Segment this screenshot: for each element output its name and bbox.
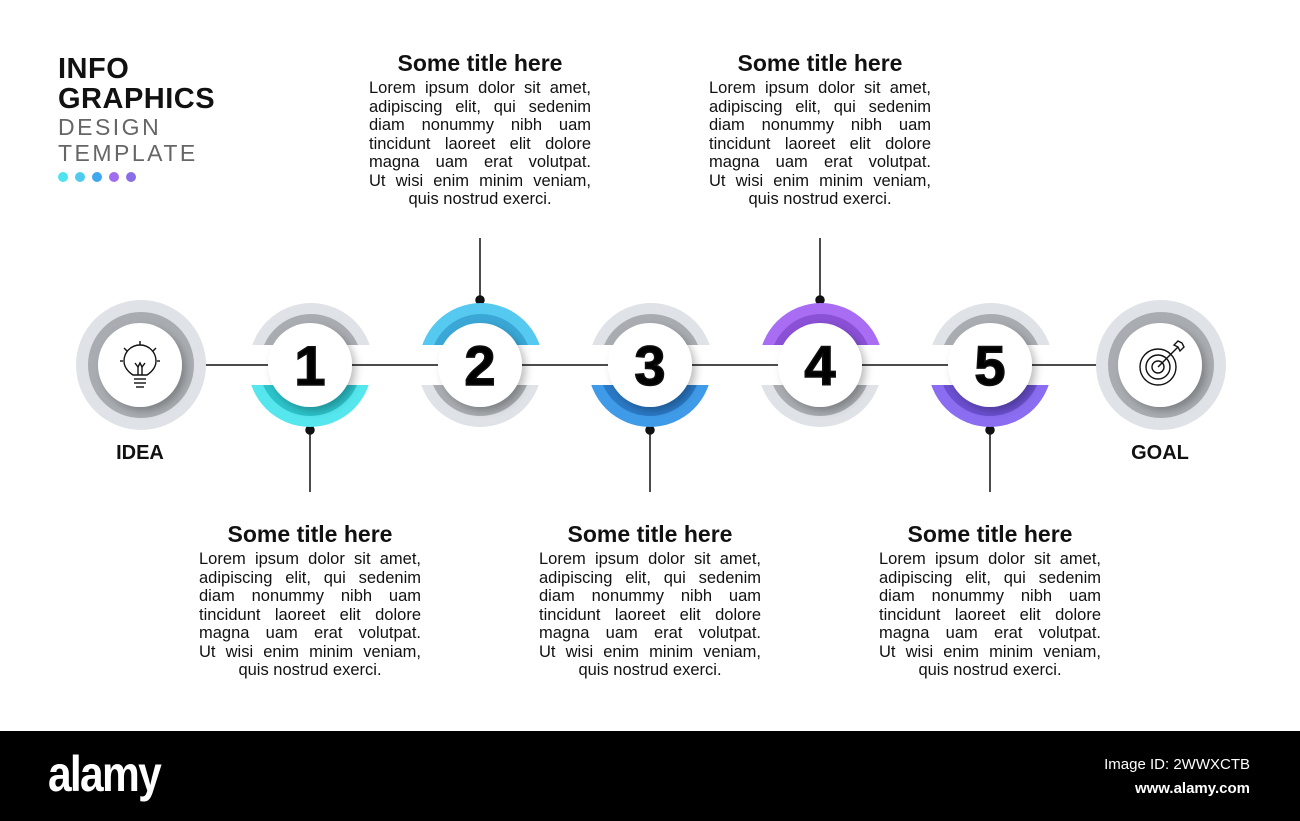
node: goal bbox=[1096, 300, 1226, 430]
dots bbox=[58, 172, 136, 182]
text block: step 1: quis nostrud exerci. bbox=[238, 661, 382, 679]
text block: step 4: diam nonummy nibh uam bbox=[709, 116, 931, 134]
text block: step 1: Lorem ipsum dolor sit amet, bbox=[199, 550, 421, 568]
text block: step 4 bbox=[709, 50, 931, 208]
text block: step 2: Ut wisi enim minim veniam, bbox=[369, 172, 591, 190]
connector line bbox=[140, 364, 1160, 366]
vertical connectors bbox=[306, 238, 994, 492]
node: idea bbox=[76, 300, 206, 430]
text block: step 2: tincidunt laoreet elit dolore bbox=[369, 134, 591, 152]
text block: step 2: Some title here bbox=[398, 50, 562, 76]
timeline graphic bbox=[76, 238, 1226, 492]
text block: step 3: quis nostrud exerci. bbox=[578, 661, 722, 679]
text block: step 3: tincidunt laoreet elit dolore bbox=[539, 606, 761, 624]
text block: step 3 bbox=[539, 521, 761, 679]
image id: Image ID: 2WWXCTB bbox=[1104, 756, 1250, 773]
label: IDEA: IDEA bbox=[116, 442, 164, 464]
title block: INFO bbox=[58, 53, 129, 85]
icon: light bulb bbox=[120, 341, 160, 387]
node 5 bbox=[928, 303, 1053, 427]
text block: step 5: magna uam erat volutpat. bbox=[879, 624, 1101, 642]
text block: step 5 bbox=[879, 521, 1101, 679]
text block: step 4: magna uam erat volutpat. bbox=[709, 153, 931, 171]
text block: step 5: quis nostrud exerci. bbox=[918, 661, 1062, 679]
title block: TEMPLATE bbox=[58, 140, 198, 166]
title block: DESIGN bbox=[58, 114, 161, 140]
node 4: 4 bbox=[804, 334, 836, 397]
text block: step 2: adipiscing elit, qui sedenim bbox=[369, 98, 591, 116]
text block: step 2: magna uam erat volutpat. bbox=[369, 153, 591, 171]
icon: target bbox=[1140, 341, 1184, 385]
node 3 bbox=[588, 303, 713, 427]
node 4 bbox=[758, 303, 883, 427]
text block: step 4: Ut wisi enim minim veniam, bbox=[709, 172, 931, 190]
text block: step 3: magna uam erat volutpat. bbox=[539, 624, 761, 642]
node 2 bbox=[418, 303, 543, 427]
text block: step 1: diam nonummy nibh uam bbox=[199, 587, 421, 605]
text block: step 1: tincidunt laoreet elit dolore bbox=[199, 606, 421, 624]
node 3: 3 bbox=[634, 334, 666, 397]
text block: step 5: Some title here bbox=[908, 521, 1072, 547]
text block: step 5: diam nonummy nibh uam bbox=[879, 587, 1101, 605]
text block: step 1 bbox=[199, 521, 421, 679]
text block: step 3: Lorem ipsum dolor sit amet, bbox=[539, 550, 761, 568]
text block: step 4: tincidunt laoreet elit dolore bbox=[709, 134, 931, 152]
image id bbox=[1104, 756, 1250, 797]
text block: step 2 bbox=[369, 50, 591, 208]
node 1 bbox=[248, 303, 373, 427]
label: GOAL: GOAL bbox=[1131, 442, 1189, 464]
logo: alamy: alamy bbox=[48, 746, 160, 802]
text block: step 1: Some title here bbox=[228, 521, 392, 547]
title block bbox=[58, 53, 215, 182]
node 1: 1 bbox=[294, 334, 326, 397]
text block: step 5: Lorem ipsum dolor sit amet, bbox=[879, 550, 1101, 568]
text block: step 1: magna uam erat volutpat. bbox=[199, 624, 421, 642]
footer bar bbox=[0, 731, 1300, 821]
node 2: 2 bbox=[464, 334, 496, 397]
text block: step 3: Some title here bbox=[568, 521, 732, 547]
text block: step 3: diam nonummy nibh uam bbox=[539, 587, 761, 605]
text block: step 2: Lorem ipsum dolor sit amet, bbox=[369, 79, 591, 97]
node 5: 5 bbox=[974, 334, 1006, 397]
text block: step 4: Some title here bbox=[738, 50, 902, 76]
text block: step 4: quis nostrud exerci. bbox=[748, 190, 892, 208]
text block: step 3: Ut wisi enim minim veniam, bbox=[539, 642, 761, 660]
text block: step 3: adipiscing elit, qui sedenim bbox=[539, 568, 761, 586]
text block: step 1: adipiscing elit, qui sedenim bbox=[199, 568, 421, 586]
text block: step 4: Lorem ipsum dolor sit amet, bbox=[709, 79, 931, 97]
text block: step 5: tincidunt laoreet elit dolore bbox=[879, 606, 1101, 624]
text block: step 4: adipiscing elit, qui sedenim bbox=[709, 98, 931, 116]
title block: GRAPHICS bbox=[58, 83, 215, 115]
image id: www.alamy.com bbox=[1135, 780, 1250, 797]
text block: step 2: diam nonummy nibh uam bbox=[369, 116, 591, 134]
text block: step 5: adipiscing elit, qui sedenim bbox=[879, 568, 1101, 586]
text block: step 5: Ut wisi enim minim veniam, bbox=[879, 642, 1101, 660]
text block: step 2: quis nostrud exerci. bbox=[408, 190, 552, 208]
text block: step 1: Ut wisi enim minim veniam, bbox=[199, 642, 421, 660]
